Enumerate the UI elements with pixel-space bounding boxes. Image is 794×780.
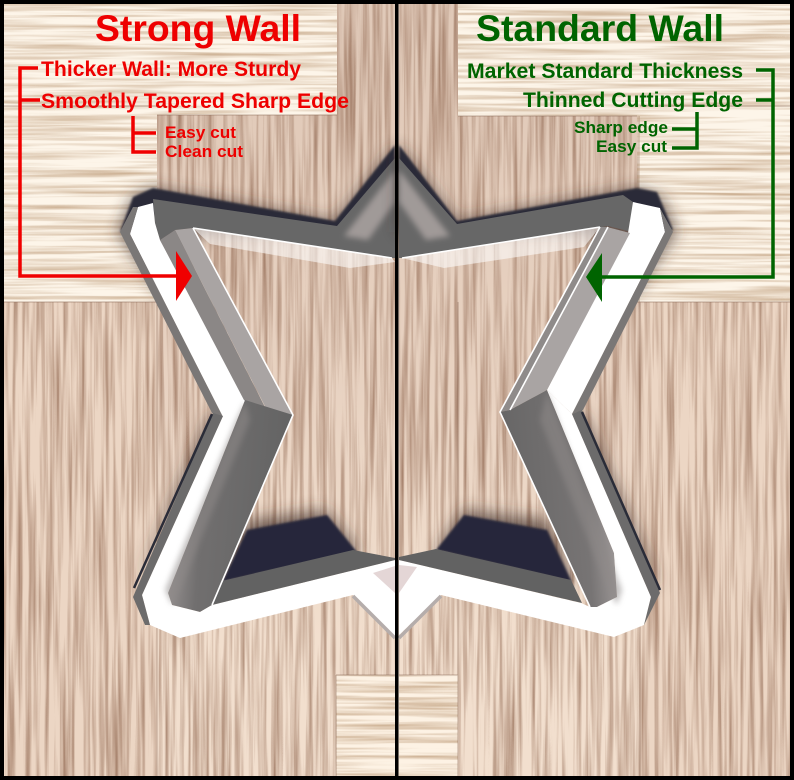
text: sharp edge: Sharp edge [574,118,668,137]
upper right white band [547,202,665,414]
lower grey inner wall left [168,400,293,612]
upper inner lighter band left [175,228,293,416]
arrow: green bracket to wall [586,70,773,302]
dark bottom shadow right [436,515,572,582]
lower grey inner wall right [500,390,617,607]
text: thicker wall: Thicker Wall: More Sturdy [41,58,301,81]
star cutter: standard wall (right) [399,145,676,638]
top grey wall left [153,158,395,258]
outer grey strip upper right [572,208,673,414]
dark top shadow right [399,145,673,232]
dark bottom shadow left [222,515,357,582]
arrow: red bracket to wall [20,68,192,301]
text: market standard: Market Standard Thickness [467,60,743,83]
soft shadow halo left [118,145,396,590]
double edge fill right [500,227,608,412]
star cutter: strong wall (left) [118,145,396,638]
grey bottom tip right [399,596,441,638]
light inner strip right [402,227,600,268]
bracket: red sub-items [133,116,156,152]
soft shadow halo right [399,145,676,590]
upper inner darker band left [160,230,270,417]
heading: Strong Wall: Strong Wall [95,8,301,49]
top apex highlight right [399,170,450,240]
cut edge hairlines right [402,227,608,607]
lower white band left [142,400,395,638]
text: clean cut: Clean cut [165,142,243,161]
light inner strip left [193,228,395,268]
upper inner band right [510,227,630,410]
lower white band right [399,390,651,637]
text: easy cut left: Easy cut [165,123,236,142]
dark edge lower right [582,412,660,590]
dark top shadow left [120,145,395,232]
cut edge hairline left [193,228,392,605]
grey bottom tip left [353,596,395,638]
fade of white into wall right [540,392,622,605]
dark edge lower left [134,414,212,588]
text: smoothly tapered: Smoothly Tapered Sharp Edge [41,90,349,113]
outer grey strip lower right [572,410,660,625]
bracket: green sub-items [672,112,697,148]
pink patch left [373,566,395,593]
heading: Standard Wall: Standard Wall [476,8,724,49]
center divider line [395,0,398,780]
text: thinned edge: Thinned Cutting Edge [523,89,743,112]
bottom grey wall left [212,550,395,605]
bottom grey wall right [399,549,582,603]
top apex highlight left [344,170,395,240]
top grey wall right [399,158,633,258]
upper left white band [130,203,247,417]
outer grey strip upper left [120,207,223,417]
pink patch right [399,565,417,593]
text: easy cut right: Easy cut [596,137,667,156]
fade of white into wall left [165,402,250,605]
outer grey strip lower left [133,413,223,625]
